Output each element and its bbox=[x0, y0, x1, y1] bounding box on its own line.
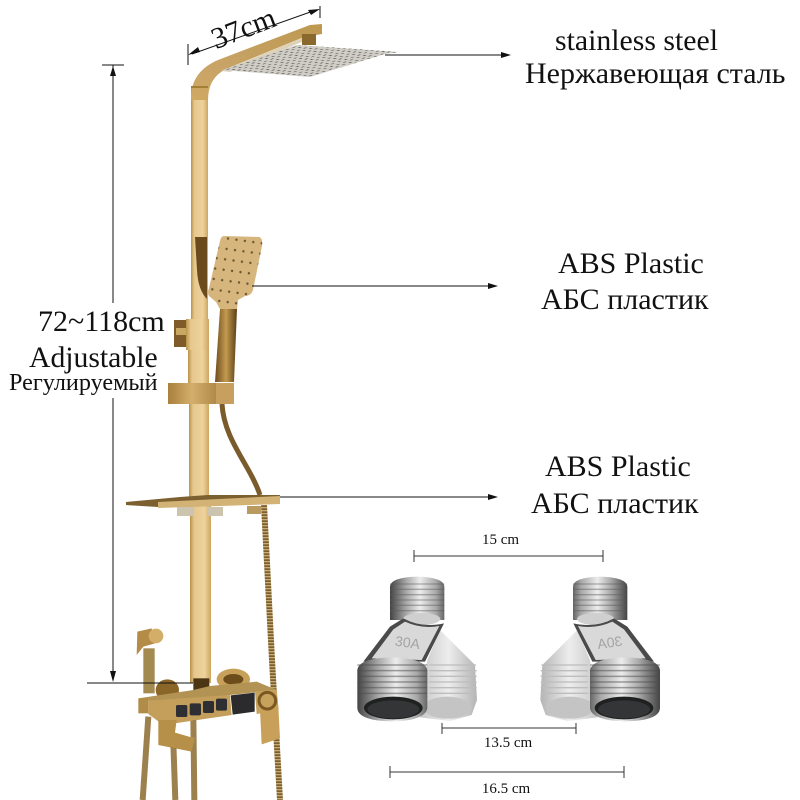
dimension: 13.5 cm: 13.5 cm bbox=[484, 735, 532, 751]
rain shower head bbox=[222, 34, 399, 77]
bidet sprayer bbox=[137, 628, 163, 693]
dimension: 15 cm: 15 cm bbox=[482, 532, 519, 548]
dimension: 37cm: 37cm bbox=[207, 1, 281, 56]
dimension: 13.5 cm bbox=[442, 723, 576, 751]
sliding holder bbox=[168, 383, 234, 404]
dimension: 37cm bbox=[188, 1, 320, 65]
callout: stainless steel: Нержавеющая сталь bbox=[525, 57, 785, 90]
hand shower bbox=[208, 236, 262, 382]
display screen bbox=[231, 693, 255, 715]
control buttons bbox=[176, 699, 227, 717]
mixer body bbox=[138, 682, 277, 703]
dimension: 16.5 cm bbox=[390, 766, 624, 797]
handle bbox=[259, 692, 280, 744]
callout: stainless steel: stainless steel bbox=[555, 24, 718, 57]
callout: hand shower ABS plastic: АБС пластик bbox=[541, 283, 709, 316]
Y adapter: right bbox=[540, 577, 660, 721]
Y adapter: right: 30A bbox=[596, 633, 623, 652]
Y adapter: left bbox=[357, 577, 477, 721]
hose: hand shower to shelf and bottom bbox=[222, 404, 280, 800]
dimension: column height bbox=[87, 65, 193, 683]
height label: Регулируемый bbox=[9, 369, 158, 396]
spout bbox=[158, 720, 195, 752]
callout: shelf ABS plastic bbox=[280, 450, 699, 520]
callout: hand shower ABS plastic: ABS Plastic bbox=[558, 247, 704, 280]
shower column bbox=[188, 88, 211, 683]
height label: Adjustable bbox=[29, 342, 158, 374]
mixer and spouts bbox=[137, 628, 280, 800]
shelf bbox=[126, 495, 280, 516]
hand shower holder bbox=[195, 237, 207, 299]
callout: shelf ABS plastic: ABS Plastic bbox=[545, 450, 691, 483]
height label: 72~118cm bbox=[38, 305, 165, 338]
column bracket bbox=[174, 319, 209, 350]
shower arm bbox=[191, 24, 322, 100]
dimension: 16.5 cm: 16.5 cm bbox=[482, 781, 530, 797]
callout: shelf ABS plastic: АБС пластик bbox=[531, 487, 699, 520]
callout: hand shower ABS plastic bbox=[252, 247, 709, 316]
Y adapter: left: 30A bbox=[394, 633, 422, 652]
dimension: 15 cm bbox=[414, 532, 603, 562]
height label bbox=[9, 305, 165, 396]
callout: stainless steel bbox=[385, 24, 785, 90]
